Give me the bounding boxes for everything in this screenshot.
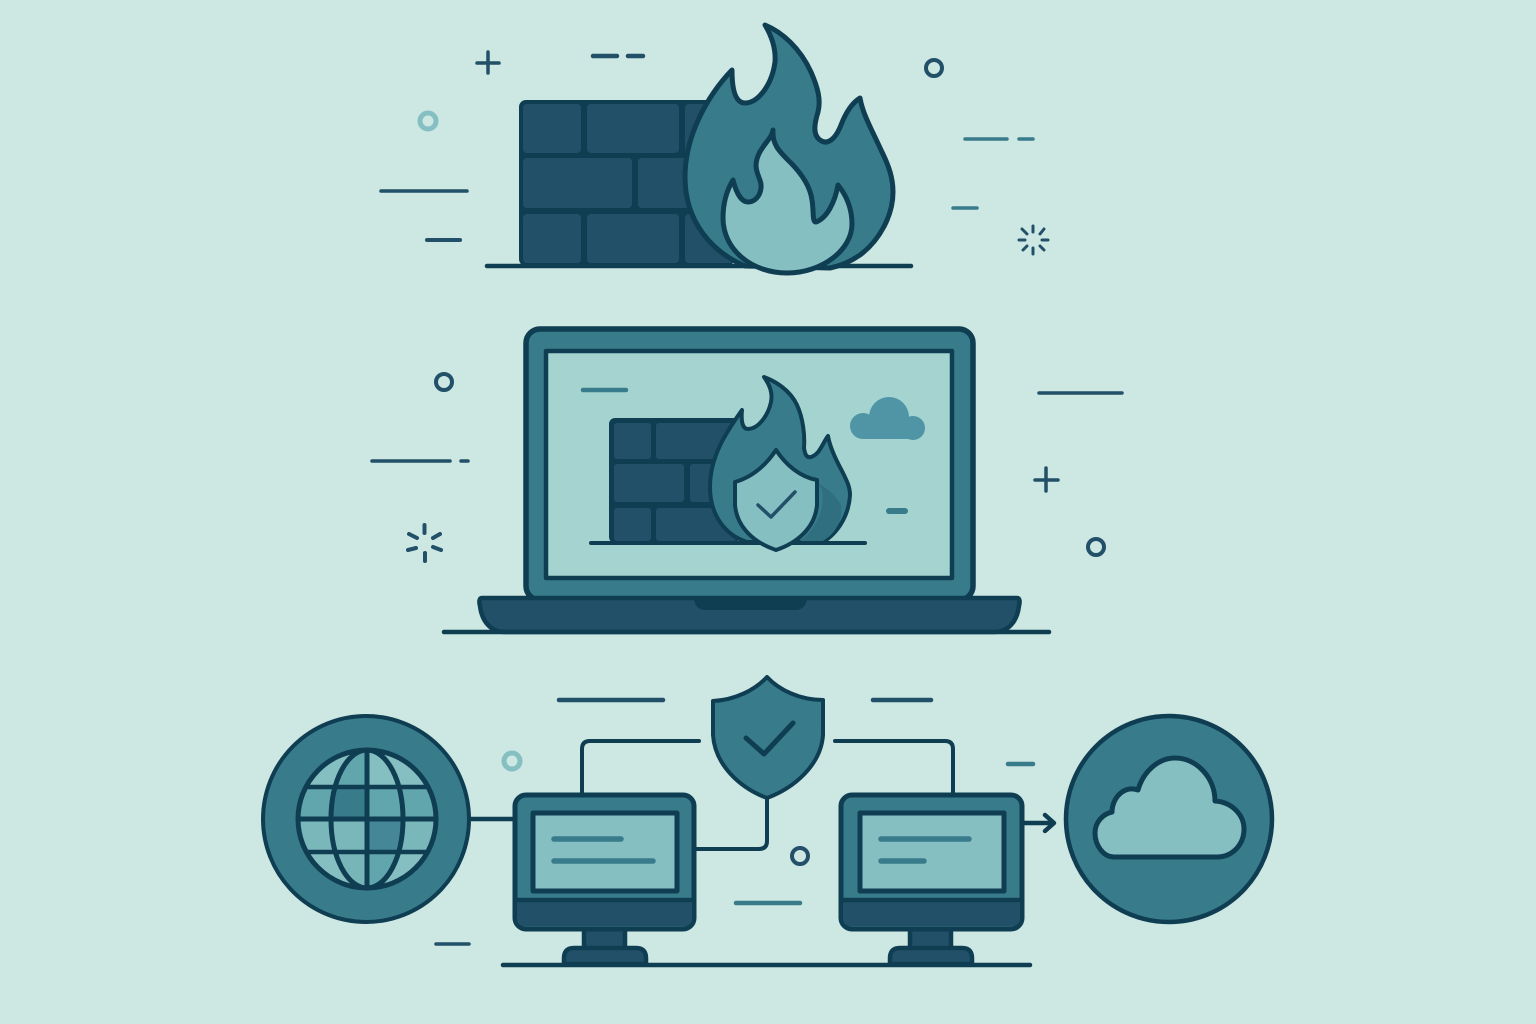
icon: cloud on screen — [850, 397, 925, 440]
laptop base — [479, 598, 1020, 632]
screen dash — [889, 508, 905, 514]
icon: screen flame — [710, 377, 850, 542]
laptop screen — [546, 351, 952, 578]
connector: shield to second monitor — [835, 741, 953, 793]
laptop floor line — [444, 630, 1049, 634]
monitor right — [841, 795, 1022, 964]
arrow to cloud — [1023, 815, 1054, 831]
icon: globe in circle — [263, 716, 469, 922]
icon: shield with check — [713, 677, 823, 798]
icon: screen brick wall — [609, 418, 739, 543]
icon: inner flame — [723, 130, 852, 273]
wall baseline — [487, 264, 911, 268]
icon: outer flame — [685, 25, 893, 268]
connector: globe to monitor — [470, 817, 513, 821]
icon: cloud in circle — [1066, 716, 1272, 922]
icon: brick wall — [519, 100, 734, 266]
panel: firewall with flame — [487, 25, 911, 273]
flame shadow — [800, 482, 841, 541]
connector: shield to monitor — [696, 797, 767, 849]
network floor line — [503, 963, 1030, 967]
screen text line — [583, 388, 626, 392]
trackpad notch — [694, 600, 807, 610]
monitor left — [515, 795, 694, 964]
panel: laptop — [444, 329, 1049, 632]
panel: network diagram — [263, 677, 1272, 965]
screen baseline — [591, 541, 865, 545]
connector: monitor up to shield — [582, 741, 699, 793]
decorative marks — [372, 52, 1122, 944]
laptop lid — [526, 329, 973, 600]
icon: shield with check — [735, 450, 817, 550]
